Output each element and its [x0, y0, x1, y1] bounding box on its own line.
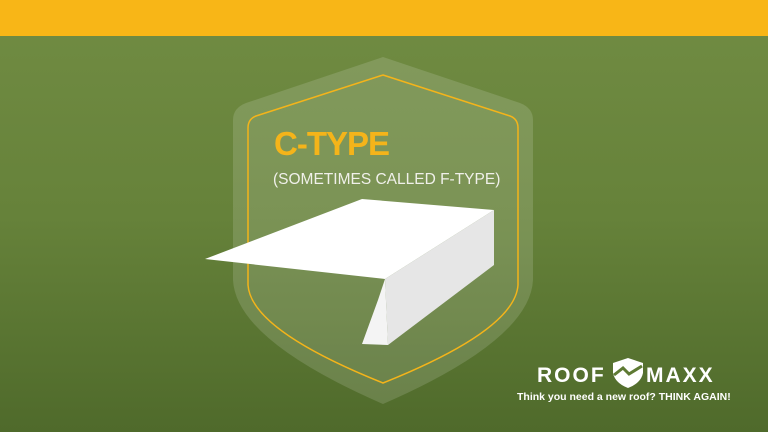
top bar [0, 0, 768, 36]
logo: MAXX [646, 364, 715, 387]
logo wordmark: ROOF [537, 364, 606, 387]
title: C-TYPE [274, 125, 389, 162]
icon: shield logo [613, 358, 643, 388]
shield [233, 57, 533, 404]
flashing illustration [205, 199, 494, 345]
logo [517, 358, 731, 403]
subtitle: (SOMETIMES CALLED F-TYPE) [273, 171, 500, 188]
tagline: Think you need a new roof? THINK AGAIN! [517, 391, 731, 403]
